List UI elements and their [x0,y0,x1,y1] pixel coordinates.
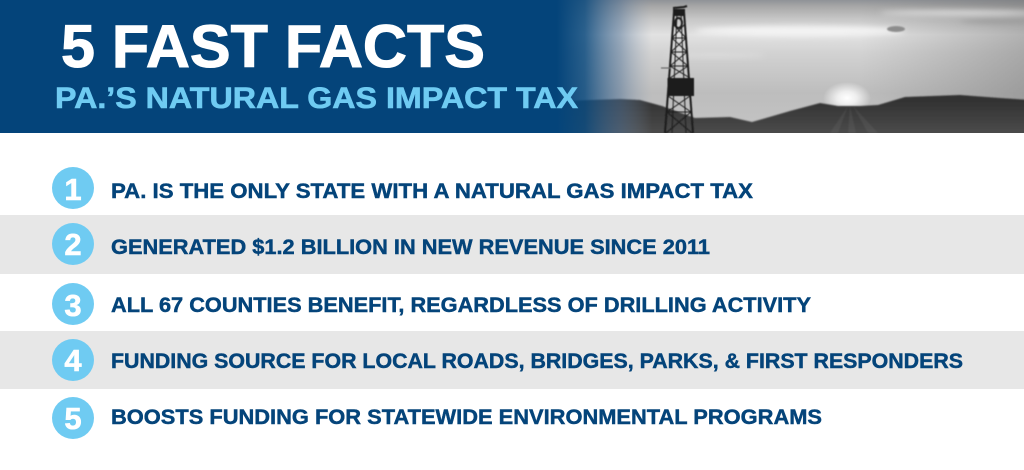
photo: drilling rig at sunset [540,0,1024,135]
fact 3 [52,283,811,325]
number badge 2: 2 [64,227,82,262]
band behind fact 4 [0,331,1024,389]
fact 1 [52,167,753,209]
number badge 5: 5 [64,401,82,436]
header banner [0,0,1024,135]
fact 5 [52,397,822,439]
subtitle: PA.’S NATURAL GAS IMPACT TAX [55,82,578,115]
number badge 1 [52,167,94,209]
number badge 2 [52,223,94,265]
number badge 5 [52,397,94,439]
fact 1 text: PA. IS THE ONLY STATE WITH A NATURAL GAS IMPACT TAX [111,180,753,203]
number badge 1: 1 [64,172,82,207]
light rays over the ridge [832,112,875,132]
rig tower [661,6,694,133]
number badge 4 [52,339,94,381]
number badge 4: 4 [64,343,82,378]
fact 5 text: BOOSTS FUNDING FOR STATEWIDE ENVIRONMENTAL PROGRAMS [111,406,822,429]
number badge 3: 3 [64,288,82,323]
fact 3 text: ALL 67 COUNTIES BENEFIT, REGARDLESS OF DRILLING ACTIVITY [111,294,811,317]
fact 4 text: FUNDING SOURCE FOR LOCAL ROADS, BRIDGES, PARKS, & FIRST RESPONDERS [111,350,963,373]
band behind fact 2 [0,215,1024,274]
fact 4 [52,339,963,381]
title: 5 FAST FACTS [61,13,485,80]
number badge 3 [52,283,94,325]
fact 2 text: GENERATED $1.2 BILLION IN NEW REVENUE SINCE 2011 [111,236,710,259]
fact 2 [52,223,710,265]
